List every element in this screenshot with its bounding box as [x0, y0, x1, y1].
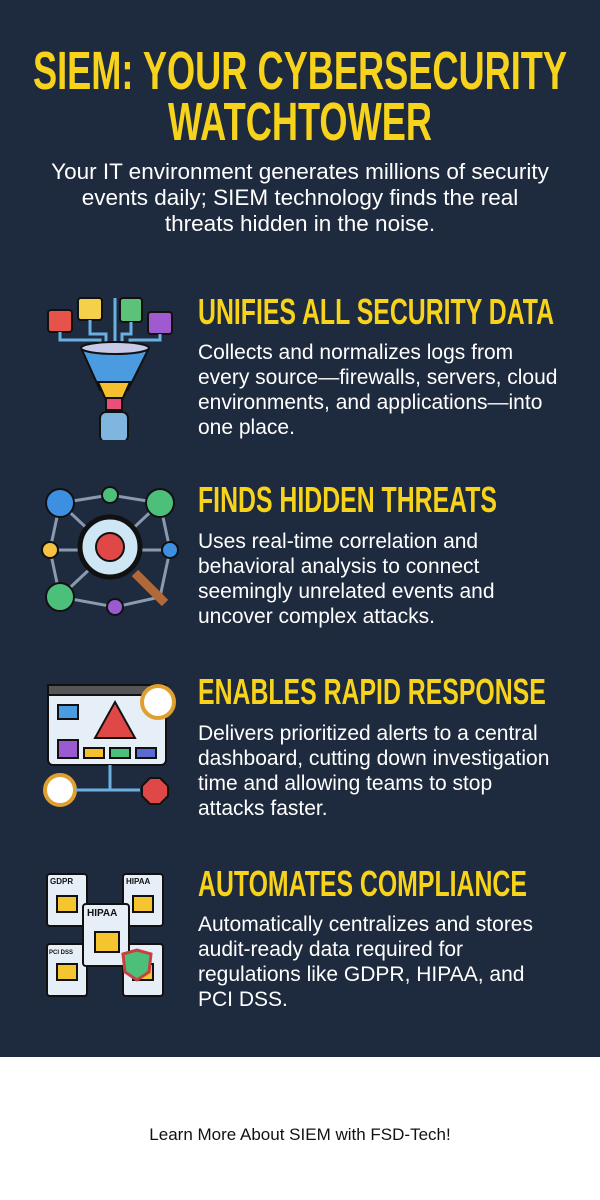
text: unifies [198, 341, 557, 439]
text: finds: Uses real-time correlation and [198, 530, 478, 553]
subtitle: threats hidden in the noise. [165, 211, 435, 236]
icon: funnel [47, 297, 173, 440]
icon: dashboard [43, 684, 176, 807]
text: automates: audit-ready data required for [198, 938, 463, 961]
icon: compliance docs: GDPR [50, 877, 73, 886]
text: enables: time and allowing teams to stop [198, 772, 492, 795]
heading: finds: FINDS HIDDEN THREATS [198, 479, 497, 520]
subtitle: events daily; SIEM technology finds the real [82, 185, 518, 210]
text: unifies: every source—firewalls, servers, cloud [198, 366, 557, 389]
text: automates [198, 913, 533, 1011]
text: automates: regulations like GDPR, HIPAA, and [198, 963, 524, 986]
text: finds [198, 530, 495, 628]
text: finds: behavioral analysis to connect [198, 555, 479, 578]
text: automates: Automatically centralizes and stores [198, 913, 533, 936]
text: enables: attacks faster. [198, 797, 328, 820]
title: WATCHTOWER [168, 92, 432, 152]
text: finds: seemingly unrelated events and [198, 580, 495, 603]
icon: compliance docs [46, 873, 164, 997]
heading: automates: AUTOMATES COMPLIANCE [198, 863, 527, 904]
text: unifies: environments, and applications—into [198, 391, 542, 414]
text: enables [198, 722, 549, 820]
title: SIEM: YOUR CYBERSECURITY [33, 41, 567, 101]
subtitle [51, 159, 549, 236]
text: enables: Delivers prioritized alerts to a central [198, 722, 538, 745]
icon: compliance docs: HIPAA [126, 877, 151, 886]
text: automates: PCI DSS. [198, 988, 288, 1011]
text: unifies: Collects and normalizes logs from [198, 341, 513, 364]
text: finds: uncover complex attacks. [198, 605, 435, 628]
subtitle: Your IT environment generates millions of security [51, 159, 549, 184]
text: enables: dashboard, cutting down investigation [198, 747, 549, 770]
heading: unifies: UNIFIES ALL SECURITY DATA [198, 291, 554, 332]
icon: compliance docs: PCI DSS [49, 950, 73, 956]
text: unifies: one place. [198, 416, 295, 439]
icon: network magnifier [41, 486, 179, 616]
icon: compliance docs: HIPAA [87, 908, 117, 919]
heading: enables: ENABLES RAPID RESPONSE [198, 671, 546, 712]
footer link text: Learn More About SIEM with FSD-Tech! [149, 1125, 451, 1144]
title [33, 41, 567, 152]
